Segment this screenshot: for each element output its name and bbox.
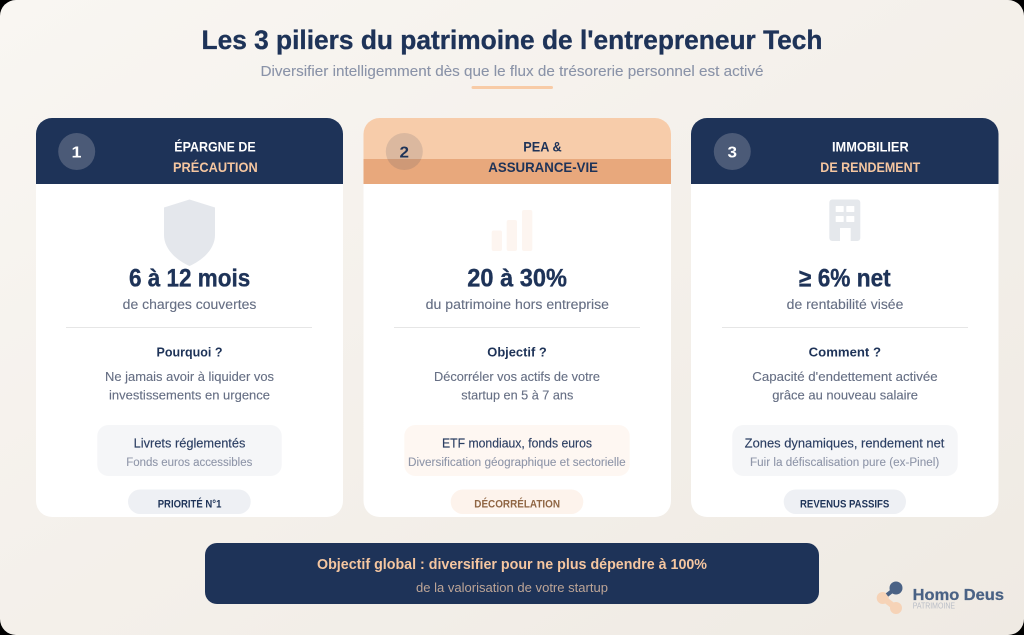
explanation: Décorréler vos actifs de votre	[434, 370, 600, 384]
callout subtext: de la valorisation de votre startup	[416, 581, 608, 595]
tag pill	[128, 490, 251, 514]
card background	[36, 118, 343, 517]
accent underline	[472, 86, 553, 89]
logo mark	[877, 582, 902, 614]
card heading: ASSURANCE-VIE	[488, 159, 598, 175]
card header band	[36, 118, 343, 184]
number badge 3	[714, 133, 751, 170]
number badge 1	[58, 133, 95, 170]
card background	[364, 118, 671, 517]
key figure caption: de charges couvertes	[123, 297, 257, 312]
explanation	[105, 370, 274, 403]
card heading: ÉPARGNE DE	[174, 139, 256, 155]
card heading	[820, 139, 921, 175]
panel: pillar 1 épargne de précaution	[36, 118, 343, 517]
card heading: PEA &	[523, 139, 562, 155]
explanation: Ne jamais avoir à liquider vos	[105, 370, 274, 384]
panel: pillar 3 immobilier de rendement	[691, 118, 998, 517]
number badge 2: 2	[400, 144, 409, 162]
key figure: ≥ 6% net	[799, 265, 891, 293]
info box: Zones dynamiques, rendement net	[745, 437, 945, 451]
subtitle: Diversifier intelligemment dès que le flux de trésorerie personnel est activé	[260, 64, 764, 80]
header block	[202, 25, 822, 89]
title: Les 3 piliers du patrimoine de l'entrepreneur Tech	[202, 25, 822, 55]
card heading: DE RENDEMENT	[820, 159, 921, 175]
info box: Diversification géographique et sectorielle	[408, 457, 626, 469]
key figure caption: du patrimoine hors entreprise	[426, 297, 609, 312]
tag pill: PRIORITÉ N°1	[158, 498, 221, 510]
key figure: 20 à 30%	[467, 265, 567, 293]
logo wordmark: Homo Deus	[913, 587, 1004, 604]
question: Comment ?	[809, 344, 881, 360]
card header band	[364, 118, 671, 184]
tag pill	[451, 490, 583, 514]
number badge 2	[386, 133, 423, 170]
explanation: grâce au nouveau salaire	[772, 389, 918, 403]
number badge 1: 1	[72, 144, 82, 162]
explanation: investissements en urgence	[109, 389, 270, 403]
icon: building	[829, 200, 860, 241]
card heading	[488, 139, 598, 175]
callout: global objective	[205, 543, 819, 604]
panel: pillar 2 PEA et assurance-vie	[364, 118, 671, 517]
card heading	[173, 139, 258, 175]
icon: shield	[164, 200, 215, 266]
tag pill	[784, 490, 906, 514]
tag pill: DÉCORRÉLATION	[474, 498, 560, 510]
explanation	[434, 370, 600, 403]
logo tagline: PATRIMOINE	[913, 602, 955, 610]
info box: Fonds euros accessibles	[126, 457, 253, 469]
card background	[691, 118, 998, 517]
info box	[97, 425, 282, 476]
question: Objectif ?	[487, 344, 547, 360]
info box	[732, 425, 958, 476]
card heading: IMMOBILIER	[832, 139, 909, 155]
explanation: startup en 5 à 7 ans	[461, 389, 573, 403]
key figure caption: de rentabilité visée	[787, 297, 903, 312]
number badge 3: 3	[728, 144, 737, 162]
info box: Fuir la défiscalisation pure (ex-Pinel)	[750, 457, 939, 469]
info box	[404, 425, 630, 476]
question: Pourquoi ?	[156, 344, 223, 360]
card header band	[691, 118, 998, 184]
icon: bar chart	[492, 210, 532, 251]
logo: Homo Deus Patrimoine	[877, 582, 1004, 614]
key figure: 6 à 12 mois	[129, 265, 250, 293]
info box: ETF mondiaux, fonds euros	[442, 437, 592, 451]
explanation: Capacité d'endettement activée	[752, 370, 938, 384]
explanation	[752, 370, 938, 403]
callout headline: Objectif global : diversifier pour ne plus dépendre à 100%	[317, 557, 707, 573]
tag pill: REVENUS PASSIFS	[800, 498, 889, 510]
info box: Livrets réglementés	[134, 437, 245, 451]
card heading: PRÉCAUTION	[173, 159, 258, 175]
